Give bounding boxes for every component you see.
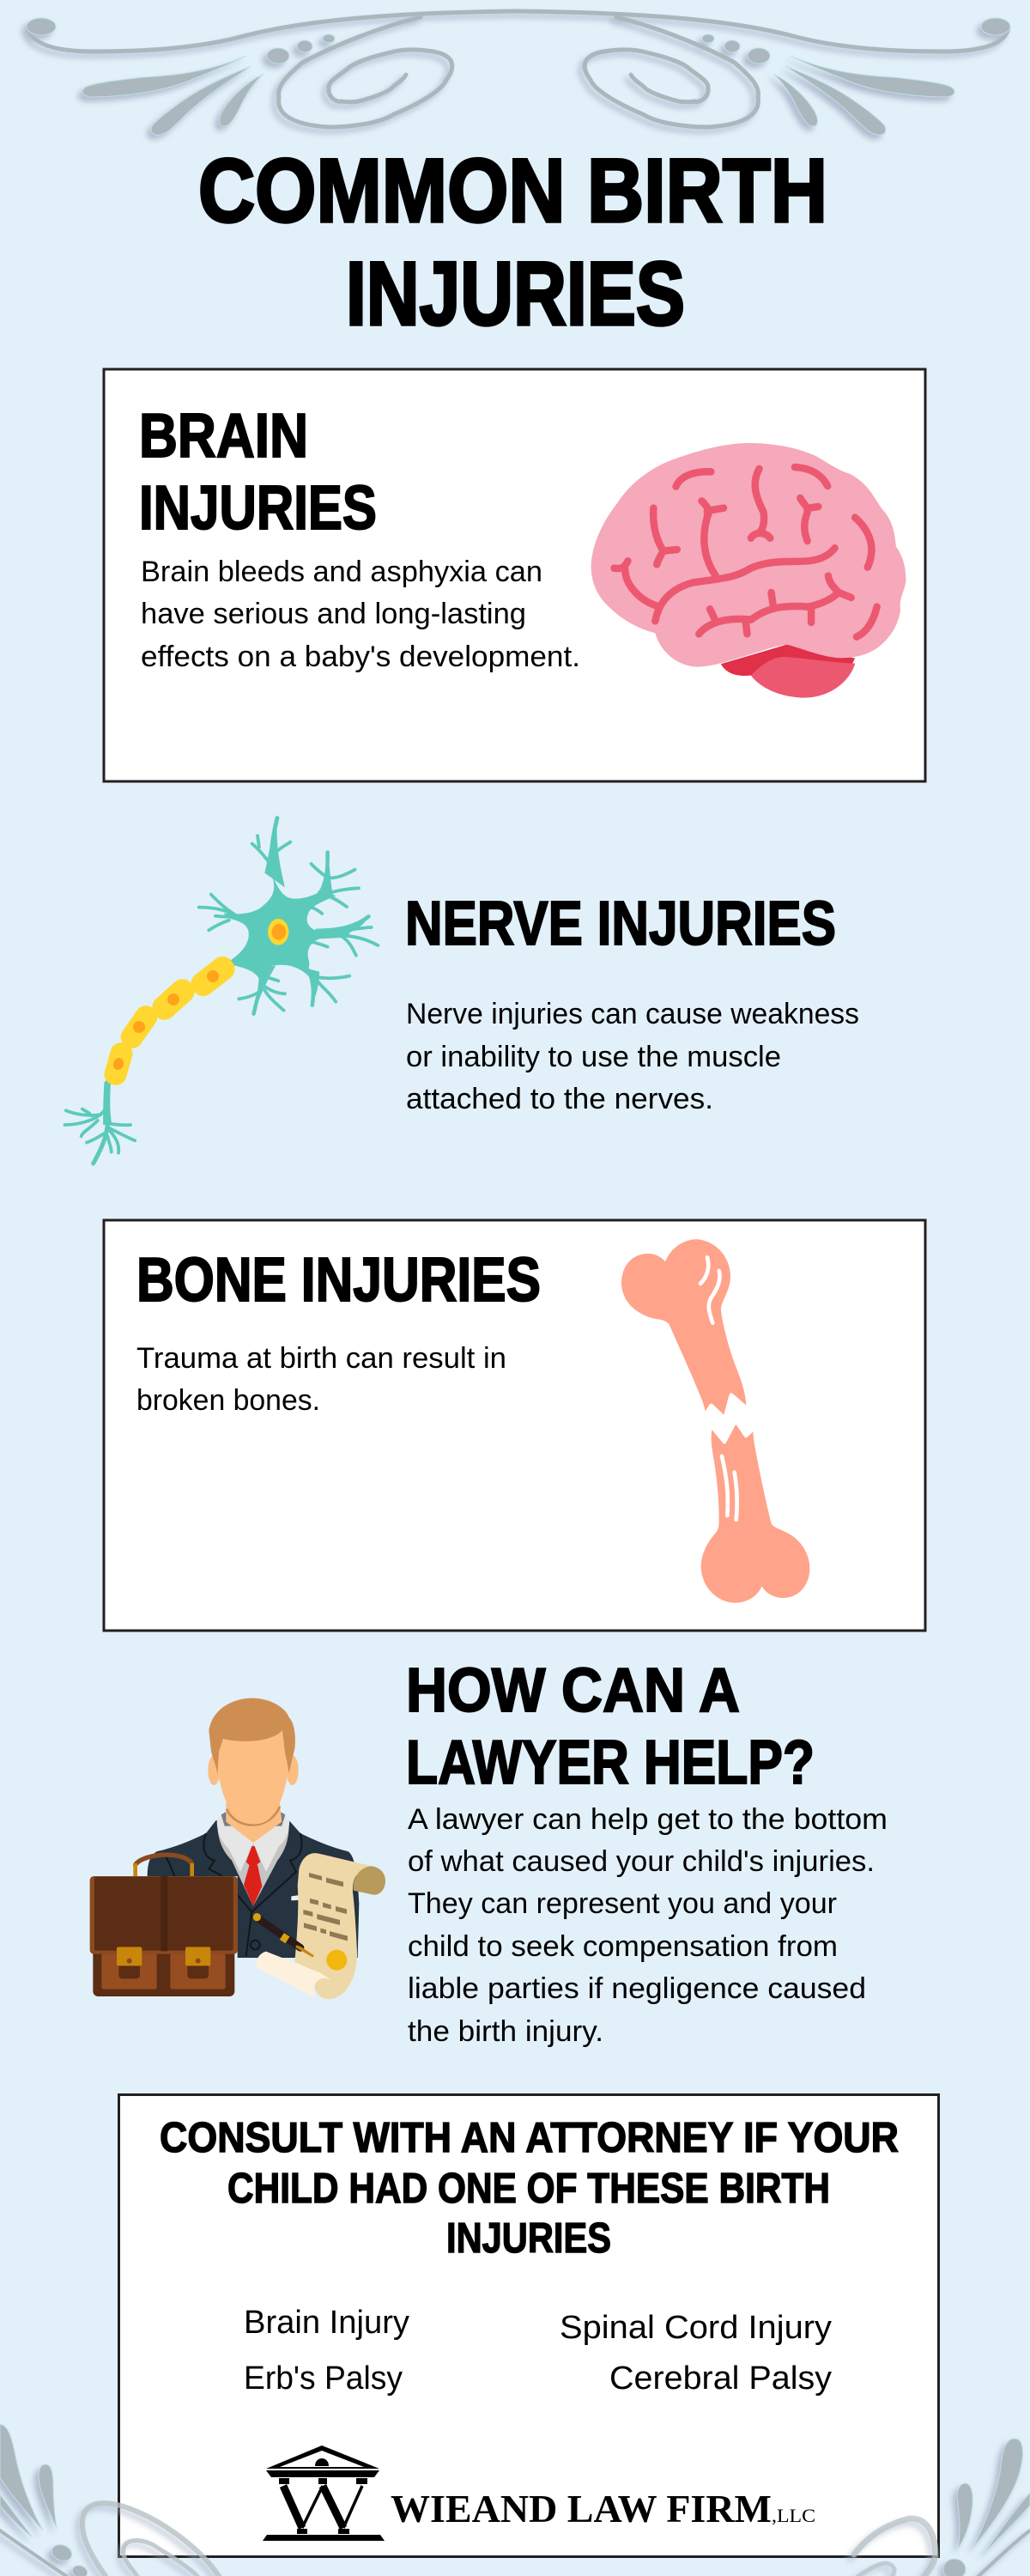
list: birth injuries: Brain Injury	[244, 2305, 409, 2341]
heading: consult: CHILD HAD ONE OF THESE BIRTH	[227, 2166, 830, 2212]
heading: consult: INJURIES	[446, 2215, 611, 2262]
list: birth injuries: Spinal Cord Injury	[560, 2310, 832, 2346]
panel: consult with an attorney	[118, 2095, 939, 2557]
scroll	[294, 1853, 372, 1999]
heading: how can a lawyer help	[406, 1656, 815, 1797]
neck	[226, 1803, 282, 1843]
briefcase	[136, 1855, 191, 1865]
text: brain description: Brain bleeds and asphyxia can	[141, 556, 542, 588]
bottom ornament right	[854, 2439, 1030, 2576]
text: lawyer description: liable parties if negligence caused	[408, 1972, 866, 2005]
face	[218, 1728, 288, 1824]
text: bone description: broken bones.	[136, 1384, 320, 1417]
heading: how can a lawyer help: HOW CAN A	[406, 1656, 740, 1725]
panel: bone injuries	[104, 1220, 925, 1631]
heading: brain injuries	[139, 402, 377, 543]
text: brain description	[141, 556, 580, 673]
hair	[209, 1698, 295, 1775]
icon: brain	[591, 443, 906, 698]
logo: Wieand Law Firm: WIEAND LAW FIRM	[391, 2487, 772, 2530]
heading: how can a lawyer help: LAWYER HELP?	[406, 1728, 815, 1797]
top ornament	[27, 11, 1010, 135]
text: lawyer description: the birth injury.	[408, 2015, 603, 2048]
panel: brain injuries	[104, 369, 925, 781]
shirt	[217, 1814, 289, 1906]
text: nerve description: or inability to use the muscle	[406, 1041, 781, 1073]
text: brain description: have serious and long-lasting	[141, 598, 526, 630]
bottom ornament left	[0, 2424, 219, 2576]
title	[198, 141, 827, 344]
ears	[208, 1755, 220, 1785]
text: lawyer description: They can represent you and your	[408, 1887, 837, 1920]
list: birth injuries: Cerebral Palsy	[609, 2360, 832, 2397]
heading: brain injuries: INJURIES	[139, 474, 377, 543]
text: brain description: effects on a baby's development.	[141, 641, 580, 673]
heading: nerve injuries: NERVE INJURIES	[405, 890, 836, 958]
text: lawyer description: child to seek compensation from	[408, 1930, 838, 1963]
title: COMMON BIRTH	[198, 141, 827, 241]
tie	[246, 1846, 260, 1866]
text: nerve description: Nerve injuries can cause weakness	[406, 998, 859, 1030]
icon: neuron	[65, 818, 378, 1163]
text: lawyer description: A lawyer can help get to the bottom	[408, 1803, 888, 1836]
logo: Wieand Law Firm	[263, 2445, 815, 2541]
list: birth injuries	[244, 2305, 832, 2397]
heading: bone injuries: BONE INJURIES	[136, 1246, 541, 1315]
text: nerve description: attached to the nerves.	[406, 1083, 713, 1115]
text: nerve description	[406, 998, 859, 1115]
text: lawyer description: of what caused your child's injuries.	[408, 1845, 875, 1878]
heading: consult	[160, 2115, 899, 2262]
icon: broken bone	[621, 1239, 809, 1603]
heading: brain injuries: BRAIN	[139, 402, 308, 471]
suit	[148, 1820, 359, 1958]
heading: consult: CONSULT WITH AN ATTORNEY IF YOUR	[160, 2115, 899, 2161]
icon: lawyer with briefcase and scroll	[90, 1698, 385, 1999]
text: bone description: Trauma at birth can result in	[136, 1342, 506, 1375]
text: lawyer description	[408, 1803, 888, 2048]
text: bone description	[136, 1342, 506, 1417]
lapels	[165, 1833, 301, 1956]
title: INJURIES	[346, 244, 685, 344]
pen	[256, 1917, 300, 1947]
logo: Wieand Law Firm: ,LLC	[772, 2505, 815, 2526]
list: birth injuries: Erb's Palsy	[244, 2360, 403, 2397]
